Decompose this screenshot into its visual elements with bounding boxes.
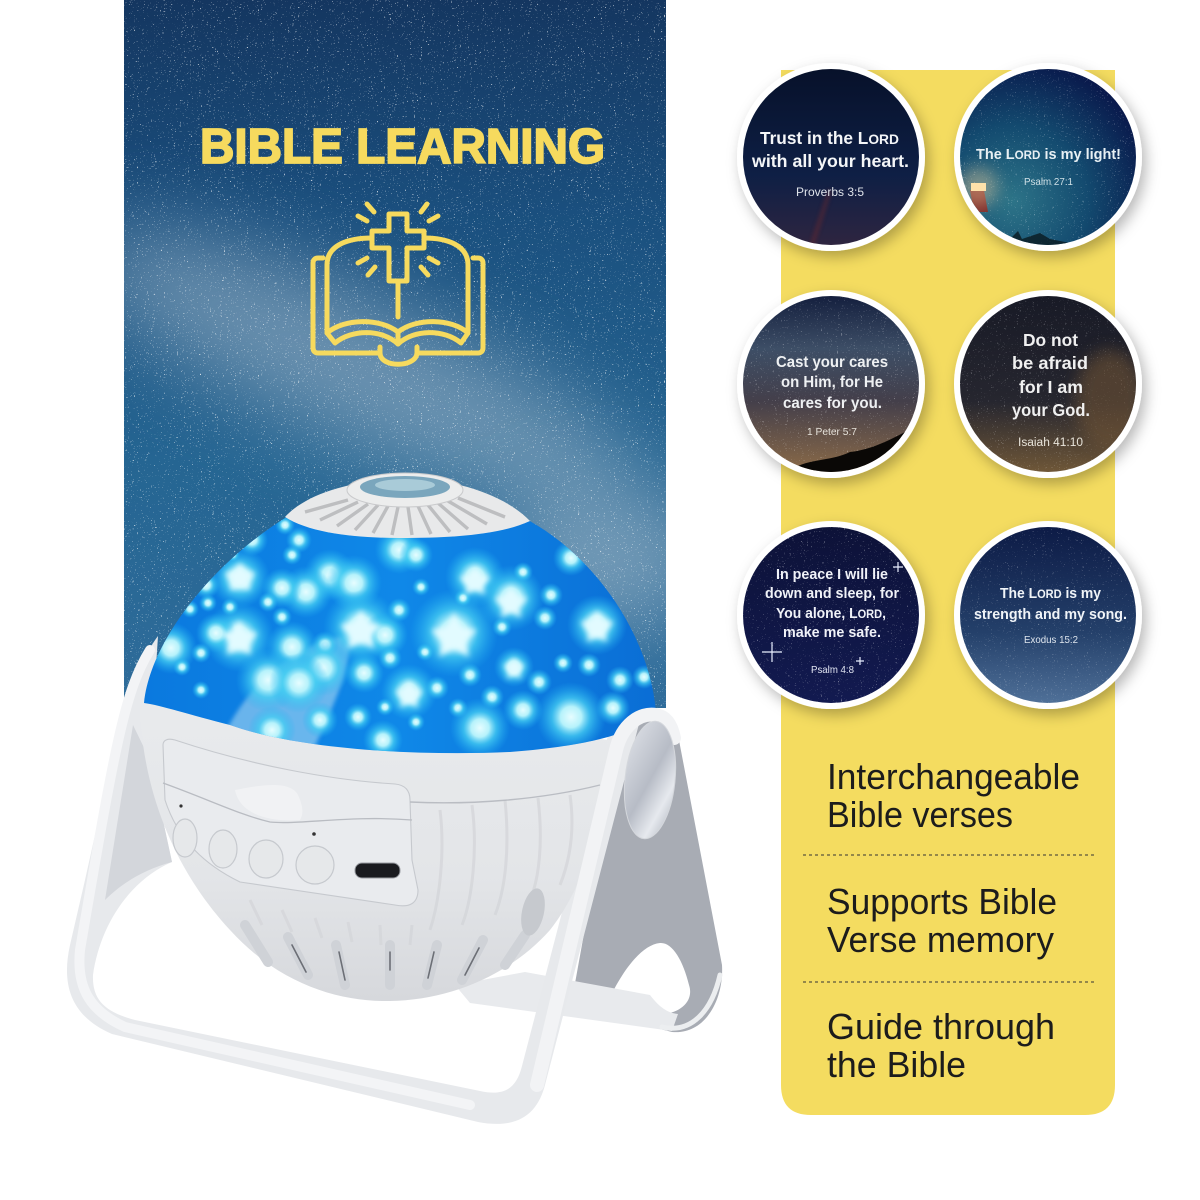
verse circle: Exodus 15:2: strength and my song. xyxy=(974,607,1127,623)
icon: open Bible with cross xyxy=(313,204,483,364)
panel: starry sky background xyxy=(124,0,666,708)
verse circle: 1 Peter 5:7: on Him, for He xyxy=(781,374,883,391)
verse circle: Proverbs 3:5 xyxy=(737,63,925,251)
verse circle: Exodus 15:2 xyxy=(954,521,1142,709)
verse circle: Isaiah 41:10: be afraid xyxy=(1012,353,1088,373)
stand: right side panel and back bar xyxy=(455,708,722,1032)
verse circle: Isaiah 41:10: Do not xyxy=(1023,330,1078,350)
verse circle: Psalm 4:8 xyxy=(737,521,925,709)
verse circle: Isaiah 41:10 xyxy=(954,290,1145,478)
verse circle: 1 Peter 5:7: Cast your cares xyxy=(776,354,888,371)
verse circle: Proverbs 3:5: Trust in the LORD xyxy=(760,128,899,148)
verse circle: Psalm 4:8: In peace I will lie xyxy=(776,567,888,583)
feature: Supports Bible Verse memory: Supports Bible xyxy=(827,881,1057,922)
verse circle: Psalm 4:8: Psalm 4:8 xyxy=(811,664,854,676)
feature: Guide through the Bible: the Bible xyxy=(827,1044,966,1085)
verse circle: 1 Peter 5:7: cares for you. xyxy=(783,395,882,412)
lamp lower body xyxy=(140,690,610,1001)
feature: Interchangeable Bible verses: Interchangeable xyxy=(827,756,1080,797)
verse circle: Isaiah 41:10: your God. xyxy=(1012,400,1090,420)
USB-C port xyxy=(355,863,400,878)
stand: front frame xyxy=(67,636,640,1124)
verse circle: Psalm 4:8: You alone, LORD, xyxy=(776,606,886,622)
verse circle: Psalm 27:1: The LORD is my light! xyxy=(976,146,1121,163)
feature: Interchangeable Bible verses xyxy=(827,756,1080,835)
rotation knob xyxy=(619,719,681,841)
vent slots xyxy=(245,886,549,985)
verse circle: Proverbs 3:5: with all your heart. xyxy=(751,151,909,171)
verse circle: 1 Peter 5:7: 1 Peter 5:7 xyxy=(807,426,857,438)
verse circle: Exodus 15:2: The LORD is my xyxy=(1000,586,1101,602)
feature: Interchangeable Bible verses: Bible verses xyxy=(827,794,1013,835)
projector top cap with ribs xyxy=(285,473,530,538)
verse circle: Psalm 4:8: down and sleep, for xyxy=(765,586,899,602)
verse circle: Proverbs 3:5: Proverbs 3:5 xyxy=(796,187,864,199)
feature: Supports Bible Verse memory xyxy=(827,881,1057,960)
verse circle: Isaiah 41:10: for I am xyxy=(1019,377,1083,397)
verse circle: Isaiah 41:10: Isaiah 41:10 xyxy=(1018,437,1083,449)
stand: right arm front rim xyxy=(537,715,674,1085)
glowing blue dome with stars xyxy=(144,518,656,754)
verse circle: 1 Peter 5:7 xyxy=(737,290,925,478)
verse circle: Psalm 4:8: make me safe. xyxy=(783,625,881,641)
verse circle: Exodus 15:2: Exodus 15:2 xyxy=(1024,634,1078,646)
verse circle: Psalm 27:1: Psalm 27:1 xyxy=(1024,176,1073,188)
feature: Supports Bible Verse memory: Verse memory xyxy=(827,919,1054,960)
feature: Guide through the Bible: Guide through xyxy=(827,1006,1055,1047)
control panel door xyxy=(163,739,600,906)
verse circle: Psalm 27:1 xyxy=(954,63,1142,251)
control buttons xyxy=(173,804,334,884)
body ribs xyxy=(250,795,572,945)
title: BIBLE LEARNING xyxy=(200,120,605,174)
panel: yellow feature column xyxy=(781,70,1115,1115)
product: star projector lamp xyxy=(67,473,722,1124)
feature: Guide through the Bible xyxy=(827,1006,1055,1085)
